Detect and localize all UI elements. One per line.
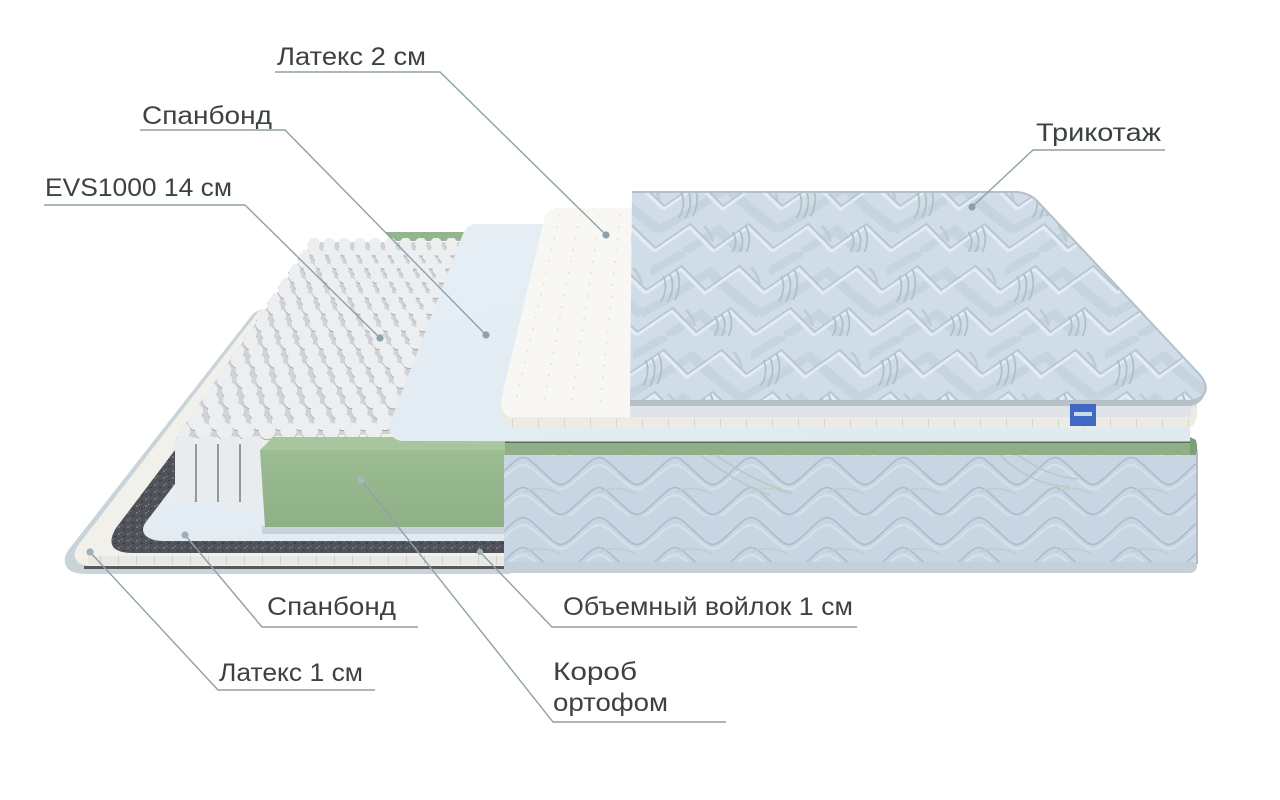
layer: foam box orthofoam: [260, 437, 510, 527]
callout: Объемный войлок 1 см: [477, 549, 857, 627]
callout: Спанбонд lower: [181, 531, 418, 627]
callout: Спанбонд upper: Спанбонд: [142, 102, 272, 130]
layer: knit cover top panel: [630, 192, 1206, 406]
callout: EVS1000 14 см: [44, 174, 384, 342]
callout: Короб ортофом: ортофом: [553, 689, 668, 717]
layer: top spunbond: [389, 224, 1190, 442]
layer: pocket springs EVS1000: [175, 242, 463, 438]
callout: Латекс 2 см: Латекс 2 см: [277, 43, 426, 71]
layer: lower spunbond: [143, 480, 505, 541]
layer: latex 2 cm: [500, 208, 1197, 428]
layer: green foam back edge: [385, 232, 466, 241]
callout: Спанбонд lower: Спанбонд: [267, 593, 396, 621]
shadow below foam box: [262, 526, 505, 534]
callout: Короб ортофом: Короб: [553, 658, 637, 686]
layer: bottom latex 1 cm with outer cover: [65, 309, 510, 574]
callout: Спанбонд upper: [140, 102, 490, 339]
callout: Объемный войлок 1 см: Объемный войлок 1 см: [563, 593, 853, 621]
blue label tag: [1070, 404, 1096, 426]
layer: spring front columns: [175, 436, 263, 508]
callout: Латекс 1 см: [86, 548, 375, 690]
layer: quilted side panel: [504, 452, 1198, 573]
callout: Трикотаж: [968, 119, 1165, 211]
callout: Короб ортофом: [357, 476, 726, 722]
layer: felt 1 cm: [111, 450, 505, 553]
callout: Трикотаж: Трикотаж: [1036, 119, 1161, 147]
callout: Латекс 1 см: Латекс 1 см: [219, 659, 363, 687]
callout: Латекс 2 см: [275, 43, 610, 239]
callout: EVS1000 14 см: EVS1000 14 см: [45, 174, 232, 202]
green foam strip above quilted side: [505, 437, 1198, 455]
mattress layer diagram: [44, 47, 1207, 723]
